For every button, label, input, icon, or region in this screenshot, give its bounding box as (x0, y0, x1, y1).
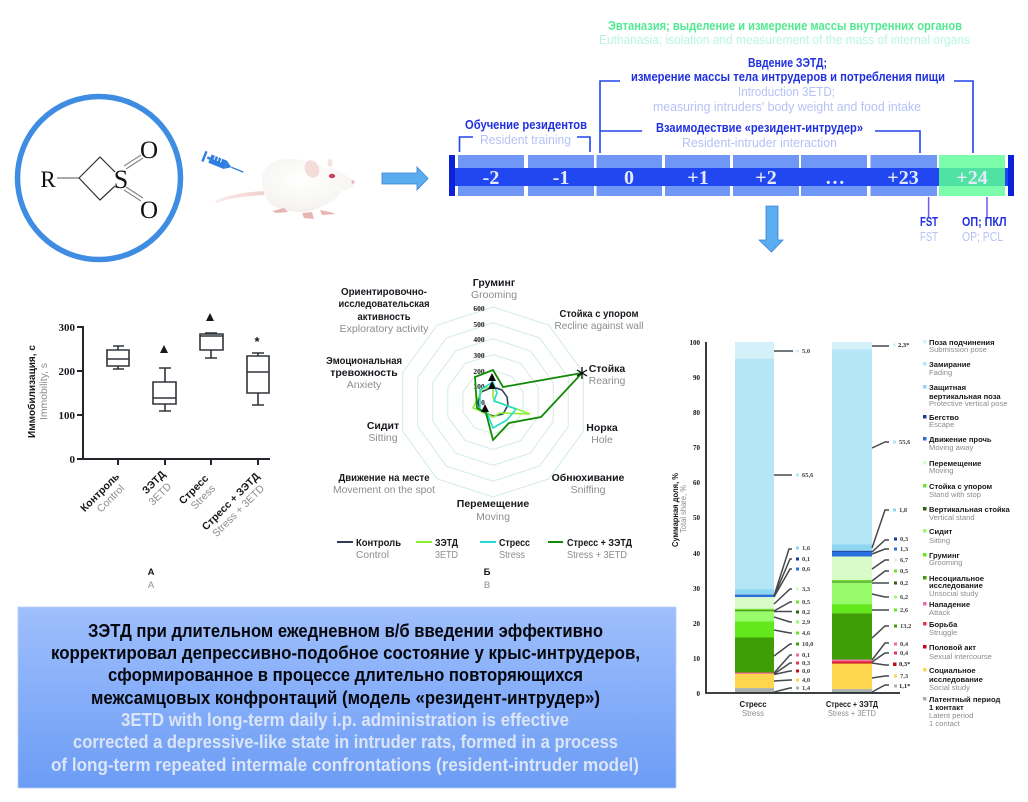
value labels: stress + 3ETD: 0,4 (900, 641, 909, 648)
series: control (478, 387, 508, 416)
radar significance markers (481, 367, 587, 412)
legend: social study: исследование (929, 675, 983, 684)
value labels: stress + 3ETD: 0,3 (900, 536, 909, 543)
legend: moving away: Движение прочь (929, 435, 992, 444)
x category labels: Стресс + ЗЭТД (200, 470, 262, 533)
value labels: stress + 3ETD: 1,1* (899, 683, 910, 690)
legend: fading: Замирание (929, 360, 971, 369)
value labels: stress + 3ETD: 6,2 (900, 594, 908, 601)
legend: protective vertical pose: вертикальная поза (929, 392, 1001, 401)
x category labels: 3ETD (147, 480, 174, 508)
panel letter A: A (148, 580, 155, 591)
axis: anxiety: тревожность (330, 367, 398, 379)
value labels: stress: 10,0 (802, 641, 813, 648)
legend: moving (923, 459, 981, 475)
legend: stand with stop: Стойка с упором (929, 482, 993, 491)
conclusion: English text: of long-term repeated intermale confrontations (resident-intruder model) (51, 754, 639, 775)
molecule in blue circle (18, 96, 180, 260)
leader lines: stress (774, 351, 793, 692)
stacked bar chart (670, 339, 911, 718)
x axis labels: Стресс (739, 700, 767, 709)
panel letter B: B (484, 580, 490, 591)
axis: grooming: Grooming (471, 289, 517, 301)
value labels: stress: 1,4 (802, 685, 811, 692)
value labels: stress: 0,3 (802, 660, 811, 667)
value labels: stress: 0,1 (802, 556, 810, 563)
y axis ticks: 30 (693, 585, 700, 593)
axis: moving: Перемещение (457, 498, 529, 510)
box: control (107, 346, 129, 369)
label: introduction: Ввдение ЗЭТД; (748, 55, 827, 70)
legend: struggle: Struggle (929, 628, 957, 637)
value labels: stress + 3ETD: 13,2 (900, 623, 911, 630)
legend: escape: Escape (929, 420, 954, 429)
value labels: stress: 4,6 (802, 630, 811, 637)
y axis ticks: 20 (693, 620, 700, 628)
axes (77, 326, 270, 465)
axis: movement on the spot (333, 472, 435, 496)
label: introduction: measuring intruders' body weight and food intake (653, 99, 921, 114)
legend: sitting: Sitting (929, 536, 950, 545)
molecule in blue circle: R (40, 167, 56, 192)
axis: rearing (589, 363, 626, 387)
y axis title (670, 473, 688, 547)
x category labels (78, 468, 267, 540)
value labels: stress: 4,0 (802, 677, 810, 684)
conclusion: Russian text: сформированное в процессе длительно повторяющихся (108, 664, 583, 685)
axis: hole: Hole (591, 434, 613, 446)
legend: submission pose (923, 338, 995, 354)
legend: struggle (923, 620, 958, 637)
series: stress + 3ETD (475, 370, 582, 440)
panel letter A (148, 567, 155, 591)
y tick labels (58, 322, 76, 466)
label: introduction: Introduction 3ETD; (738, 84, 835, 99)
timeline endpoints: FST and OP/PCL: FST (920, 214, 938, 229)
y tick labels: 100 (58, 410, 76, 422)
conclusion: Russian text (51, 620, 640, 708)
value labels: stress + 3ETD: 1,3 (900, 546, 909, 553)
timeline headers (465, 18, 970, 150)
legend: social study: Social study (929, 683, 970, 692)
significance markers (160, 313, 260, 353)
axis labels (326, 277, 644, 523)
value labels: stress + 3ETD (893, 342, 911, 690)
day numbers: -2 (483, 167, 499, 189)
axis: sitting: Sitting (368, 432, 398, 444)
axis: exploratory activity: Ориентировочно- (341, 286, 427, 298)
axis: exploratory activity (338, 286, 430, 335)
radar legend: Stress + 3ETD (567, 549, 627, 561)
x axis labels: Stress (742, 709, 764, 718)
value labels: stress: 2,9 (802, 619, 811, 626)
radar scale labels: 200 (473, 367, 485, 376)
radar scale labels: 100 (473, 382, 485, 391)
legend: unsocial study: Unsocial study (929, 589, 979, 598)
x category labels: Контроль (78, 470, 123, 514)
arrow: right (382, 167, 428, 190)
label: resident training: Resident training (480, 132, 571, 147)
y tick labels: 300 (58, 322, 76, 334)
bar: stress + 3ETD (832, 342, 872, 693)
legend: latent period: 1 contact (929, 719, 961, 728)
label: introduction (631, 55, 945, 114)
axis: moving: Moving (476, 511, 510, 523)
conclusion: English text: corrected a depressive-like state in intruder rats, formed in a process (73, 731, 618, 752)
timeline bar (449, 155, 1014, 196)
chart axes (706, 342, 900, 693)
molecule in blue circle: S (114, 165, 128, 194)
label: resident training (465, 117, 587, 147)
label: resident-intruder interaction: Resident-intruder interaction (682, 135, 837, 150)
legend: vertical stand: Vertical stand (929, 513, 975, 522)
axis: exploratory activity: активность (358, 311, 411, 323)
y tick labels: 0 (70, 454, 76, 466)
y axis title (26, 345, 50, 438)
leader lines: stress + 3ETD (872, 346, 889, 692)
axis: hole: Норка (586, 422, 618, 434)
label: euthanasia: Эвтаназия; выделение и измерение массы внутренних органов (608, 18, 962, 33)
day numbers: -1 (553, 167, 569, 189)
label: resident-intruder interaction: Взаимодествие «резидент-интрудер» (656, 120, 863, 135)
axis: sitting: Сидит (367, 420, 399, 432)
axis: grooming: Груминг (473, 277, 516, 289)
legend: moving: Перемещение (929, 459, 981, 468)
radar scale labels: 500 (473, 320, 485, 329)
legend: latent period: Латентный период (929, 695, 1000, 704)
day numbers: 0 (624, 167, 634, 189)
y axis title: Суммарная доля, % (670, 473, 680, 547)
value labels: stress: 5,0 (802, 348, 810, 355)
timeline endpoints: FST and OP/PCL (920, 197, 1006, 244)
legend: grooming: Груминг (929, 551, 960, 560)
legend: grooming (923, 551, 962, 567)
legend: escape (923, 413, 959, 429)
radar scale labels: 300 (473, 351, 485, 360)
y axis ticks: 40 (693, 550, 700, 558)
value labels: stress + 3ETD: 0,4 (900, 650, 909, 657)
legend: moving away: Moving away (929, 443, 974, 452)
timeline endpoints: FST and OP/PCL: OP; PCL (962, 229, 1003, 244)
axis: movement on the spot: Movement on the spot (333, 484, 435, 496)
label: resident-intruder interaction (656, 120, 863, 150)
legend: attack: Нападение (929, 600, 970, 609)
axis: recline against wall (554, 308, 644, 332)
radar legend: Стресс + ЗЭТД (567, 537, 632, 549)
value labels: stress + 3ETD: 0,5 (900, 568, 909, 575)
bar: stress (735, 342, 774, 693)
x category labels: Stress + 3ETD (210, 482, 267, 540)
label: euthanasia: Euthanasia; isolation and measurement of the mass of internal organs (599, 32, 970, 47)
value labels: stress + 3ETD: 55,6 (899, 439, 911, 446)
radar scale labels: 400 (473, 335, 485, 344)
box plot chart A (26, 313, 270, 591)
value labels: stress: 0,0 (802, 668, 810, 675)
y axis ticks (690, 339, 700, 698)
molecule in blue circle: O (140, 197, 158, 224)
box: stress (200, 333, 223, 358)
value labels: stress: 0,2 (802, 609, 810, 616)
legend: submission pose: Поза подчинения (929, 338, 995, 347)
value labels: stress: 0,6 (802, 566, 811, 573)
radar legend: Стресс (499, 537, 530, 549)
legend: submission pose: Submission pose (929, 345, 987, 354)
y axis ticks: 90 (693, 374, 700, 382)
axis: moving (457, 498, 529, 523)
conclusion: English text (51, 709, 639, 775)
y axis ticks: 70 (693, 444, 700, 452)
x axis labels: Stress + 3ETD (828, 709, 876, 718)
y axis title: Иммобилизация, с (26, 345, 38, 438)
day numbers: +24 (956, 167, 988, 189)
legend: vertical stand (923, 505, 1010, 522)
radar legend (337, 537, 632, 561)
legend: protective vertical pose: Защитная (929, 383, 966, 392)
radar legend: Контроль (356, 537, 401, 549)
conclusion: Russian text: межсамцовых конфронтаций (модель «резидент-интрудер») (91, 687, 600, 708)
panel letter B (484, 567, 491, 591)
series: stress (480, 382, 516, 428)
box: stress + 3ETD (247, 353, 269, 405)
legend: fading: Fading (929, 368, 952, 377)
y axis title: Total share, % (678, 485, 688, 533)
conclusion box (18, 607, 676, 788)
axis: sniffing: Обнюхивание (552, 472, 625, 484)
radar legend: ЗЭТД (435, 537, 458, 549)
radar legend: Control (356, 549, 389, 561)
axis: recline against wall: Стойка с упором (560, 308, 639, 320)
axis: rearing: Стойка (589, 363, 625, 375)
axis: rearing: Rearing (589, 375, 626, 387)
legend: social study: Социальное (929, 666, 976, 675)
legend: protective vertical pose (923, 383, 1008, 408)
radar scale labels: 0 (481, 398, 485, 407)
legend: sexual intercourse: Sexual intercourse (929, 652, 992, 661)
value labels: stress: 1,6 (802, 545, 811, 552)
legend: social study (923, 666, 983, 692)
day numbers: … (825, 167, 845, 189)
legend: unsocial study: исследование (929, 581, 983, 590)
axis: exploratory activity: Exploratory activity (340, 323, 429, 335)
x axis labels: Стресс + ЗЭТД (826, 700, 878, 709)
day numbers: +23 (887, 167, 919, 189)
legend: sitting (923, 527, 953, 545)
label: euthanasia (599, 18, 970, 47)
axis: anxiety (326, 355, 402, 391)
y axis ticks: 60 (693, 479, 700, 487)
x category labels: ЗЭТД (140, 468, 168, 497)
timeline endpoints: FST and OP/PCL: ОП; ПКЛ (962, 214, 1006, 229)
radar legend: Stress (499, 549, 525, 561)
label: introduction: измерение массы тела интрудеров и потребления пищи (631, 69, 945, 84)
value labels: stress: 0,5 (802, 599, 811, 606)
day numbers: +2 (755, 167, 777, 189)
conclusion: Russian text: ЗЭТД при длительном ежедневном в/б введении эффективно (88, 620, 603, 641)
radar legend: 3ETD (435, 549, 458, 561)
y axis ticks: 80 (693, 409, 700, 417)
legend: latent period (923, 695, 1000, 728)
legend: protective vertical pose: Protective vertical pose (929, 399, 1008, 408)
x category labels: Стресс (177, 473, 211, 507)
y tick labels: 200 (58, 366, 76, 378)
legend: latent period: 1 контакт (929, 703, 964, 712)
legend: latent period: Latent period (929, 711, 973, 720)
legend: moving: Moving (929, 466, 953, 475)
y axis ticks: 10 (693, 655, 700, 663)
axis: anxiety: Anxiety (347, 379, 382, 391)
day numbers: +1 (687, 167, 709, 189)
legend: sexual intercourse (923, 643, 992, 661)
legend: struggle: Борьба (929, 620, 958, 629)
y axis title: Immobility, s (38, 363, 50, 420)
molecule in blue circle: O (140, 137, 158, 164)
legend: fading (923, 360, 971, 377)
label: resident training: Обучение резидентов (465, 117, 587, 132)
legend: vertical stand: Вертикальная стойка (929, 505, 1010, 514)
panel letter A: А (148, 567, 155, 578)
value labels: stress + 3ETD: 6,7 (900, 557, 909, 564)
axis: grooming (471, 277, 517, 301)
day numbers (483, 167, 988, 189)
legend: stand with stop (923, 482, 993, 499)
conclusion: English text: 3ETD with long-term daily i.p. administration is effective (121, 709, 569, 730)
y axis ticks: 50 (693, 514, 700, 522)
value labels: stress: 65,6 (802, 472, 814, 479)
legend: grooming: Grooming (929, 558, 962, 567)
axis: sniffing: Sniffing (571, 484, 606, 496)
legend: attack: Attack (929, 608, 950, 617)
radar rings (403, 307, 583, 497)
box: 3ETD (153, 368, 176, 411)
conclusion: Russian text: корректировал депрессивно-подобное состояние у крыс-интрудеров, (51, 642, 640, 663)
value labels: stress: 3,3 (802, 586, 811, 593)
axis: recline against wall: Recline against wall (554, 320, 644, 332)
value labels: stress + 3ETD: 7,3 (900, 673, 909, 680)
axis: sitting (367, 420, 399, 444)
legend: escape: Бегство (929, 413, 959, 422)
significance markers: * (254, 334, 260, 349)
arrow: down (759, 206, 783, 252)
value labels: stress + 3ETD: 0,3* (899, 661, 910, 668)
value labels: stress + 3ETD: 1,8 (899, 507, 908, 514)
x category labels: Control (95, 483, 127, 515)
axis: sniffing (552, 472, 625, 496)
legend: unsocial study (923, 574, 984, 598)
value labels: stress + 3ETD: 2,3* (898, 342, 909, 349)
timeline brackets (460, 81, 973, 153)
legend: stand with stop: Stand with stop (929, 490, 981, 499)
legend: unsocial study: Несоциальное (929, 574, 984, 583)
axis: movement on the spot: Движение на месте (338, 472, 430, 484)
legend: attack (923, 600, 970, 617)
behaviour legend (923, 338, 1010, 728)
legend: sitting: Сидит (929, 527, 953, 536)
value labels: stress + 3ETD: 2,6 (900, 607, 909, 614)
timeline endpoints: FST and OP/PCL: FST (920, 229, 938, 244)
value labels: stress: 0,1 (802, 652, 810, 659)
legend: sexual intercourse: Половой акт (929, 643, 976, 652)
series: 3ETD (473, 387, 530, 417)
radar scale labels (473, 304, 485, 407)
legend: moving away (923, 435, 992, 452)
y axis ticks: 0 (696, 690, 700, 698)
x axis labels (739, 700, 878, 718)
axis: exploratory activity: исследовательская (338, 298, 430, 310)
y axis ticks: 100 (690, 339, 700, 347)
value labels: stress (796, 348, 814, 692)
radar chart B (326, 277, 644, 591)
axis: hole (586, 422, 618, 446)
value labels: stress + 3ETD: 0,2 (900, 580, 908, 587)
icon: syringe (202, 151, 245, 177)
image: white rat (215, 158, 355, 219)
axis: anxiety: Эмоциональная (326, 355, 402, 367)
panel letter B: Б (484, 567, 491, 578)
x category labels: Stress (189, 483, 218, 512)
radar scale labels: 600 (473, 304, 485, 313)
